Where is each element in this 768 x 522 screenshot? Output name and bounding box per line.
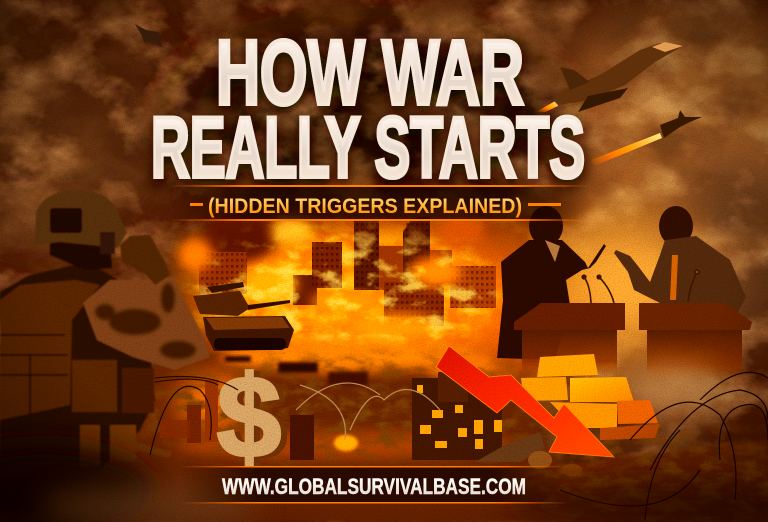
- barbed wire coils: [150, 372, 768, 520]
- distant fighter jet: [135, 24, 165, 48]
- left podium: [514, 303, 625, 375]
- dark smoke lower left: [0, 445, 260, 522]
- gold bars: [521, 354, 660, 440]
- website url: WWW.GLOBALSURVIVALBASE.COM: [222, 474, 526, 499]
- right podium: [639, 303, 752, 380]
- soldier body and vest: [0, 262, 155, 470]
- arm raised to binoculars: [83, 277, 210, 370]
- ground shadow on lower right: [510, 479, 768, 522]
- dollar sign sculpture: $: [223, 354, 287, 484]
- right politician: [614, 206, 746, 312]
- hanging gear: [80, 425, 172, 467]
- small fighter jet with flame: [591, 110, 702, 166]
- distant buildings behind dollar sign: [160, 380, 358, 460]
- ruined apartment block: [412, 372, 502, 460]
- title: HOW WAR: [216, 22, 524, 124]
- soldier: [0, 190, 210, 470]
- fires and explosions in front of the city: [170, 213, 503, 346]
- dollar sign sculpture: $: [217, 352, 281, 482]
- rocks and rubble: [475, 432, 582, 476]
- city skyline: [199, 217, 496, 326]
- subtitle: (HIDDEN TRIGGERS EXPLAINED): [208, 195, 522, 218]
- neck: [50, 240, 112, 270]
- red falling arrow: [436, 346, 614, 457]
- ground and rubble field: [113, 334, 768, 522]
- tank: [193, 282, 294, 351]
- large fighter jet: [536, 42, 683, 112]
- smoke around right side of the podiums: [622, 366, 722, 418]
- pouches: [72, 360, 154, 413]
- helmet strap plate: [100, 232, 115, 254]
- helmet visor: [50, 208, 82, 233]
- vest panel: [0, 280, 100, 420]
- website footer band: [180, 466, 570, 504]
- left politician: [497, 206, 606, 360]
- gloved hand: [120, 235, 170, 285]
- arm camouflage: [95, 283, 196, 359]
- subtitle band: [170, 185, 590, 221]
- fire glow behind the city: [170, 213, 705, 385]
- microphones: [582, 270, 699, 303]
- vest shadow lines: [0, 335, 68, 415]
- title: [151, 22, 585, 196]
- helmet: [35, 190, 127, 248]
